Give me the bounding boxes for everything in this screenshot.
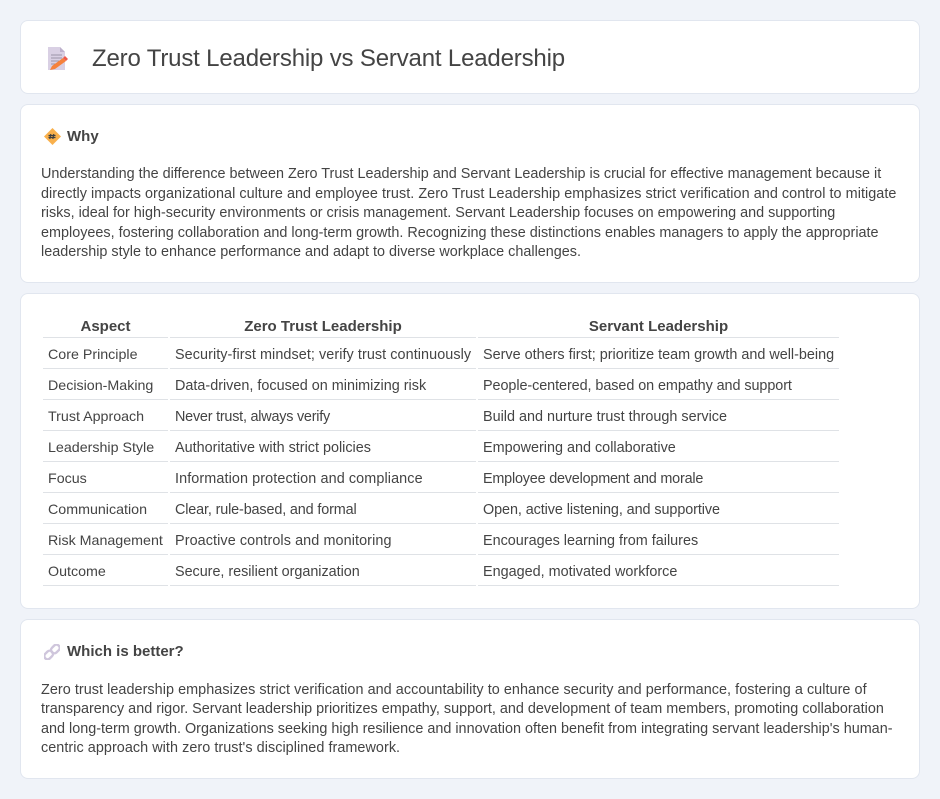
comparison table: Empowering and collaborative xyxy=(483,440,676,456)
text block: which is better: transparency and rigor. Servant leadership prioritizes empathy, support, and development of team members, promoting collaboration xyxy=(41,701,884,717)
table header: Zero Trust Leadership xyxy=(244,318,402,335)
table header: Aspect xyxy=(80,318,131,335)
text block: which is better: and long-term growth. Organizations seeking high resilience and innovation often benefit from integrating servant leadership's human- xyxy=(41,720,892,736)
comparison table: Build and nurture trust through service xyxy=(483,409,727,425)
comparison table: Never trust, always verify xyxy=(175,409,330,425)
comparison table: Trust Approach xyxy=(48,409,144,425)
comparison table: Engaged, motivated workforce xyxy=(483,564,677,580)
text block: which is better: Zero trust leadership emphasizes strict verification and accountability to enhance security and performance, fostering a culture of xyxy=(41,682,867,698)
text block: why: directly impacts organizational culture and employee trust. Zero Trust Leadership emphasizes strict verification and control to mitigate xyxy=(41,186,896,202)
comparison table: Security-first mindset; verify trust continuously xyxy=(175,347,471,363)
comparison table: Open, active listening, and supportive xyxy=(483,502,720,518)
icon: memo with pencil xyxy=(48,47,68,70)
panel: comparison table xyxy=(20,293,920,609)
icon: link xyxy=(44,644,60,660)
text block: which is better xyxy=(41,682,892,756)
panel: which is better xyxy=(20,619,920,779)
heading: why: Why xyxy=(67,128,99,145)
comparison table: Risk Management xyxy=(48,533,163,549)
comparison table: Employee development and morale xyxy=(483,471,703,487)
text block: why: risks, ideal for high-security environments or crisis management. Servant Leadership focuses on empowering and supporting xyxy=(41,205,835,221)
text block: why: leadership style to enhance performance and adapt to diverse workplace challenges. xyxy=(41,244,581,260)
text block: why: Understanding the difference between Zero Trust Leadership and Servant Leadership is crucial for effective management because it xyxy=(41,166,881,182)
comparison table: People-centered, based on empathy and support xyxy=(483,378,792,394)
comparison table: Clear, rule-based, and formal xyxy=(175,502,357,518)
panel: why xyxy=(20,104,920,283)
table header: Servant Leadership xyxy=(589,318,728,335)
comparison table: Data-driven, focused on minimizing risk xyxy=(175,378,426,394)
comparison table: Leadership Style xyxy=(48,440,154,456)
comparison table: Authoritative with strict policies xyxy=(175,440,371,456)
table header xyxy=(80,318,728,335)
comparison table: Encourages learning from failures xyxy=(483,533,698,549)
text block: why: employees, fostering collaboration and long-term growth. Recognizing these distinctions enables managers to apply the appropriate xyxy=(41,224,879,240)
title: Zero Trust Leadership vs Servant Leadership xyxy=(92,45,565,72)
heading: which is better: Which is better? xyxy=(67,643,184,660)
comparison table xyxy=(43,318,839,586)
comparison table: Outcome xyxy=(48,564,106,580)
comparison table: Focus xyxy=(48,471,87,487)
text block: why xyxy=(41,166,896,260)
comparison table: Core Principle xyxy=(48,347,138,363)
comparison table: Communication xyxy=(48,502,147,518)
text block: which is better: centric approach with zero trust's disciplined framework. xyxy=(41,740,400,756)
comparison table: Decision-Making xyxy=(48,378,153,394)
comparison table: Secure, resilient organization xyxy=(175,564,360,580)
comparison table: Information protection and compliance xyxy=(175,471,423,487)
panel: title header xyxy=(20,20,920,94)
comparison table: Serve others first; prioritize team growth and well-being xyxy=(483,347,834,363)
comparison table: Proactive controls and monitoring xyxy=(175,533,392,549)
icon: warning diamond xyxy=(44,128,61,145)
